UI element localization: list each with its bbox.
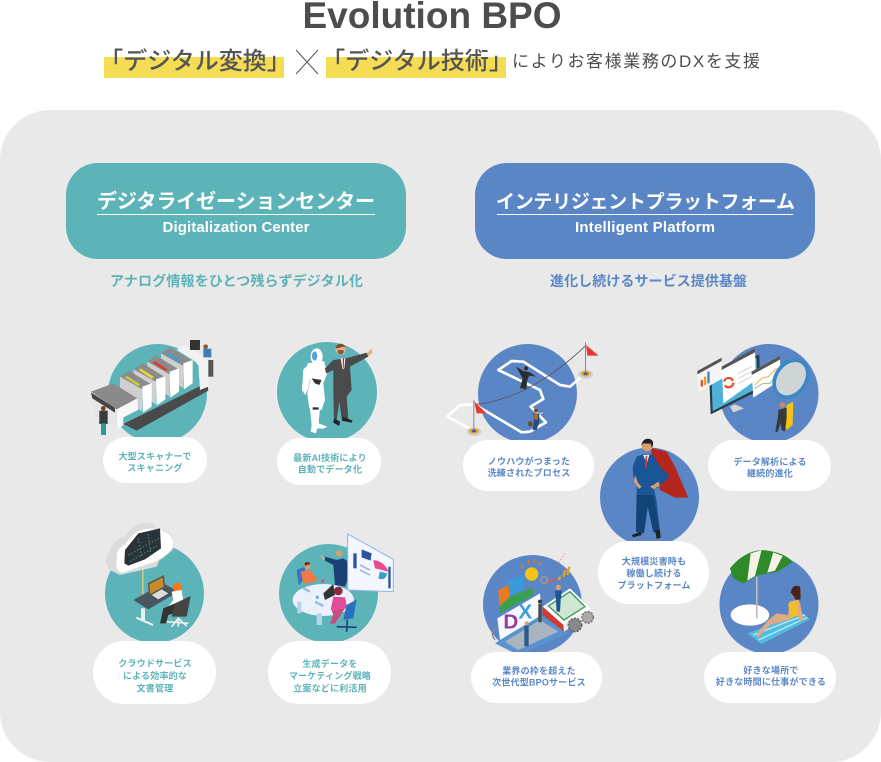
card: generated data [268,534,393,704]
icon: meeting with dashboard [293,534,393,632]
caption pill [708,440,831,491]
caption pill [277,438,381,485]
caption pill [598,541,709,604]
caption pill: 洗練されたプロセス [488,467,570,478]
caption pill: 最新AI技術により [293,452,367,463]
caption pill: スキャニング [127,462,183,473]
panel: Intelligent Platform header [475,163,815,259]
caption pill: 継続的進化 [747,468,793,478]
caption pill [704,652,836,703]
icon: robot and businessman [302,344,373,433]
icon: DX laptop and gears [492,553,593,655]
caption pill: 業界の枠を超えた [502,665,576,676]
caption pill: プラットフォーム [617,580,691,590]
caption pill: クラウドサービス [118,658,192,668]
caption pill: 生成データを [302,658,358,669]
caption pill: 次世代型BPOサービス [492,676,586,688]
icon: caped hero [632,439,688,539]
tagline: platform: 進化し続けるサービス提供基盤 [550,273,747,289]
caption pill [268,641,391,704]
icon: cloud and desk worker [106,523,191,627]
icon: DX laptop and gears: D [503,610,518,633]
icon: tightrope and flags [447,342,599,436]
subtitle: digital transformation x digital technology: 「デジタル技術」 [321,47,513,75]
card: know-how process [447,342,599,491]
card: next generation BPO [471,553,602,703]
card: cloud service [93,523,216,704]
caption pill [463,440,594,491]
card: AI technology [277,342,381,485]
icon: DX laptop and gears: X [518,600,532,623]
icon: beach umbrella and sunbather [730,550,810,644]
caption pill: ノウハウがつまった [488,456,570,466]
caption pill: 自動でデータ化 [298,464,362,474]
caption pill: 立案などに利活用 [293,682,367,694]
caption pill [93,641,216,704]
caption pill: 大型スキャナーで [118,450,192,462]
caption pill [103,437,207,483]
caption pill: 好きな時間に仕事ができる [716,676,826,687]
caption pill: マーケティング戦略 [289,670,371,681]
subtitle: digital transformation x digital technology: によりお客様業務のDXを支援 [512,52,760,71]
icon: scanner machine [91,340,213,435]
tagline: digitalization: アナログ情報をひとつ残らずデジタル化 [110,273,363,289]
caption pill: 稼働し続ける [626,568,682,578]
icon: screens and magnifier [697,348,815,432]
subtitle: digital transformation x digital technology: 「デジタル変換」 [99,47,291,75]
card: work anywhere [704,550,836,703]
subtitle: digital transformation x digital technology [99,47,760,78]
caption pill: 好きな場所で [743,664,799,676]
panel: Intelligent Platform header: Intelligent Platform [575,219,715,236]
card: disaster-resilient platform [598,439,709,604]
caption pill: による効率的な [123,670,187,681]
panel: Intelligent Platform header: インテリジェントプラットフォーム [496,191,795,213]
panel: Digitalization Center header: デジタライゼーションセンター [97,189,375,213]
caption pill: データ解析による [733,456,807,467]
caption pill: 文書管理 [137,682,173,694]
caption pill [471,652,602,703]
panel: Digitalization Center header: Digitalization Center [162,219,310,236]
card: data analytics [697,344,831,491]
panel: Digitalization Center header [66,163,406,259]
card: large scanner [91,340,213,483]
caption pill: 大規模災害時も [622,556,686,566]
